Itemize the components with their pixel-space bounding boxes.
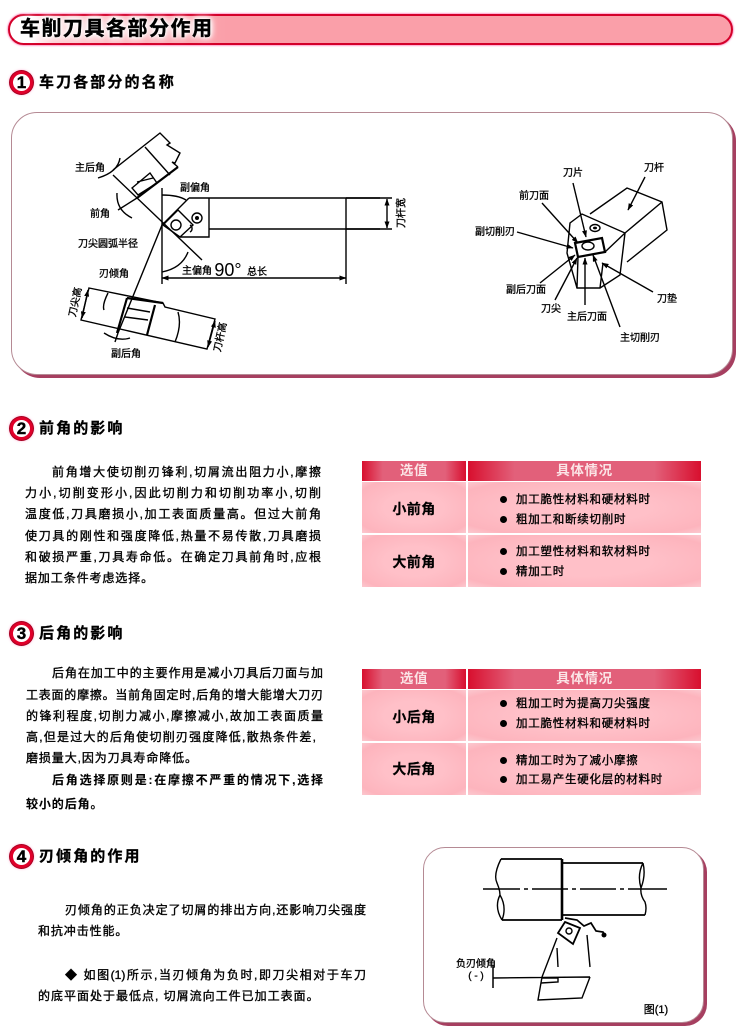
text block: inclination angle: 刃倾角的正负决定了切屑的排出方向,还影响刀尖强度: [65, 903, 366, 917]
text block: rake angle: 力小,切削变形小,因此切削力和切削功率小,切削: [25, 486, 321, 500]
diagram: turning tool geometry: 刀杆宽: [394, 198, 408, 228]
section 3 number badge: 3: [17, 624, 26, 643]
diagram: tool part names: 刀杆: [644, 162, 664, 174]
table: rake angle selection: 具体情况: [556, 463, 613, 478]
text block: rake angle: 和破损严重,刀具寿命低。在确定刀具前角时,应根: [25, 550, 321, 564]
panel: tool part names: [11, 112, 733, 375]
text block: inclination angle: 和抗冲击性能。: [38, 924, 128, 938]
diagram: figure 1 negative inclination: [456, 859, 668, 1016]
text block: inclination angle: 的底平面处于最低点, 切屑流向工件已加工表面。: [38, 989, 320, 1003]
text block: clearance angle: 后角在加工中的主要作用是减小刀具后刀面与加: [52, 666, 323, 680]
table: clearance angle selection: 精加工时为了减小摩擦: [516, 755, 638, 767]
workpiece: [483, 859, 667, 920]
diagram: turning tool geometry: 刀尖高: [66, 286, 84, 318]
table: clearance angle selection: 加工易产生硬化层的材料时: [516, 774, 663, 786]
diagram: turning tool geometry: 前角: [90, 207, 110, 220]
diagram: turning tool geometry: 90°: [214, 260, 242, 280]
section 4 number badge: [10, 845, 33, 868]
section 2 number badge: 2: [17, 419, 26, 438]
figure labels: 负刃倾角: [456, 957, 496, 970]
section 4 number badge: 4: [17, 847, 26, 866]
leader lines: [517, 177, 653, 327]
text block: clearance angle: 的锋利程度,切削力减小,摩擦减小,故加工表面质量: [26, 709, 323, 723]
diagram: tool part names: 主后刀面: [567, 311, 607, 323]
table: rake angle selection: 选值: [400, 463, 428, 478]
diagram: turning tool geometry: 主偏角: [182, 264, 212, 277]
text block: rake angle: 据加工条件考虑选择。: [25, 571, 154, 585]
angle construction lines: [113, 175, 202, 333]
text block: rake angle: [25, 465, 321, 585]
dimension: shank width: [346, 198, 392, 229]
table: rake angle selection: [362, 461, 701, 587]
tool with insert and chip: [493, 918, 606, 1000]
text block: inclination angle: ◆ 如图(1)所示,当刃倾角为负时,即刀尖相对于车刀: [65, 968, 366, 982]
text block: clearance angle: 后角选择原则是:在摩擦不严重的情况下,选择: [52, 773, 323, 787]
text block: rake angle: 温度低,刀具磨损小,加工表面质量高。但过大前角: [25, 507, 321, 521]
part labels: 刀片: [563, 166, 583, 179]
text block: inclination angle: [38, 903, 366, 1003]
table: rake angle selection: 加工塑性材料和软材料时: [516, 546, 651, 558]
diagram: tool part names: 前刀面: [519, 189, 549, 202]
diagram labels: 主后角: [75, 162, 105, 174]
diagram: turning tool geometry: 刀杆高: [211, 321, 229, 353]
table: rake angle selection: 加工脆性材料和硬材料时: [516, 494, 651, 506]
text block: clearance angle: 较小的后角。: [26, 797, 103, 811]
table: rake angle selection: 精加工时: [516, 566, 565, 578]
diagram: tool part names: 主切削刃: [620, 331, 660, 344]
table: clearance angle selection: 粗加工时为提高刀尖强度: [516, 698, 651, 710]
diagram: turning tool geometry: 副偏角: [180, 181, 210, 194]
table: clearance angle selection: [362, 669, 701, 795]
diagram: turning tool geometry: 刃倾角: [99, 267, 129, 280]
table: clearance angle selection: 选值: [400, 671, 428, 686]
title banner: 车削刀具各部分作用: [20, 18, 214, 40]
section 1 number badge: [10, 71, 33, 94]
diagram: figure 1 negative inclination: 图(1): [644, 1003, 668, 1016]
text block: clearance angle: 高,但是过大的后角使切削刃强度降低,散热条件差,: [26, 730, 316, 744]
diagram: turning tool geometry: 刀尖圆弧半径: [78, 237, 138, 250]
upper tool view: [98, 133, 180, 218]
diagram: tool part names: [475, 162, 677, 344]
title banner: [8, 14, 733, 45]
table: rake angle selection: 大前角: [392, 554, 436, 570]
table: clearance angle selection: 具体情况: [556, 671, 613, 686]
diagram: tool part names: 刀尖: [541, 302, 561, 315]
text block: clearance angle: 工表面的摩擦。当前角固定时,后角的增大能增大刀刃: [26, 688, 323, 702]
diagram: turning tool geometry: 副后角: [111, 348, 141, 360]
diagram: tool part names: 副后刀面: [506, 284, 546, 296]
table: rake angle selection: 粗加工和断续切削时: [516, 514, 626, 526]
top-view tool bar: [162, 188, 380, 284]
diagram: turning tool geometry: 总长: [247, 265, 267, 278]
text block: rake angle: 使刀具的刚性和强度降低,热量不易传散,刀具磨损: [25, 529, 321, 543]
table: rake angle selection: 小前角: [392, 501, 436, 517]
panel: figure 1 frame: [423, 847, 704, 1023]
section 2 number badge: [10, 417, 33, 440]
section 3 heading: 后角的影响: [39, 625, 125, 642]
table: clearance angle selection: 小后角: [392, 709, 436, 725]
table: clearance angle selection: 大后角: [392, 761, 436, 777]
diagram: turning tool geometry: [66, 133, 407, 360]
diagram: tool part names: 刀垫: [657, 292, 677, 305]
section 3 number badge: [10, 622, 33, 645]
section 4 heading: 刃倾角的作用: [39, 848, 142, 865]
lower tool view: [81, 288, 215, 349]
section 1 number badge: 1: [17, 73, 26, 92]
dimension: overall length: [162, 277, 346, 279]
text block: rake angle: 前角增大使切削刃锋利,切屑流出阻力小,摩擦: [52, 465, 321, 479]
diagram: figure 1 negative inclination: ( - ): [468, 971, 484, 982]
text block: clearance angle: [26, 666, 323, 811]
diagram: tool part names: 副切削刃: [475, 225, 515, 238]
table: clearance angle selection: 加工脆性材料和硬材料时: [516, 718, 651, 730]
text block: clearance angle: 磨损量大,因为刀具寿命降低。: [26, 751, 198, 765]
tool shank and head: [567, 188, 667, 288]
section 1 heading: 车刀各部分的名称: [39, 74, 176, 91]
section 2 heading: 前角的影响: [39, 420, 125, 437]
